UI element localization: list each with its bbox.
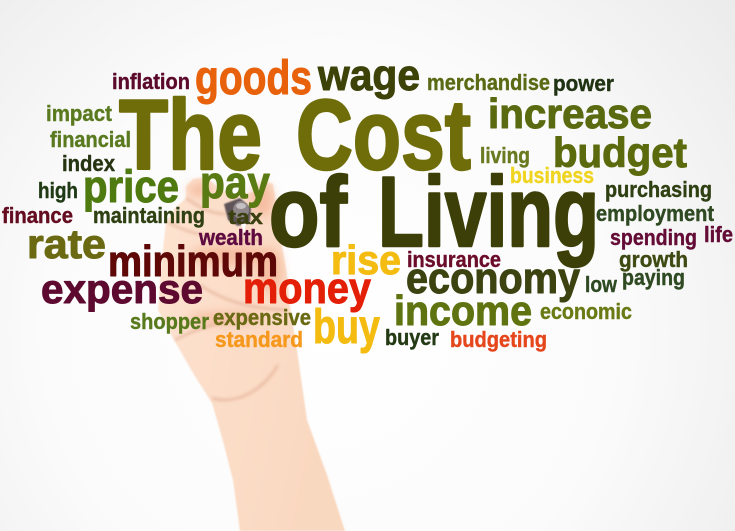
word: employment: employment: [596, 201, 715, 226]
word: financial: financial: [50, 127, 131, 152]
word: minimum: minimum: [108, 237, 278, 286]
word: wealth: wealth: [198, 225, 263, 250]
word: rate: rate: [27, 221, 106, 267]
word: business: business: [510, 163, 594, 188]
marker pen: [224, 198, 251, 234]
word: living: living: [480, 143, 530, 168]
icon: hand holding marker: [158, 177, 345, 531]
word: finance: finance: [2, 203, 73, 228]
title word: Cost: Cost: [296, 79, 471, 190]
word: high: high: [38, 178, 78, 203]
skin shading on fingers: [187, 183, 282, 324]
word: low: low: [585, 272, 618, 297]
title: The Cost of Living: [119, 79, 599, 267]
word: shopper: shopper: [130, 309, 209, 334]
word: growth: growth: [619, 247, 688, 272]
word: spending: spending: [610, 225, 697, 250]
word: tax: tax: [228, 207, 263, 229]
hand and arm: [158, 177, 345, 531]
word: expensive: expensive: [213, 305, 311, 330]
word: life: life: [704, 222, 733, 247]
word: purchasing: purchasing: [605, 177, 712, 202]
word: standard: standard: [215, 327, 303, 352]
word: inflation: inflation: [112, 69, 190, 94]
word: merchandise: merchandise: [427, 70, 550, 95]
word: power: power: [553, 71, 614, 96]
word: income: income: [394, 287, 532, 334]
word: impact: impact: [46, 101, 113, 126]
word: rise: rise: [331, 237, 401, 283]
word: budget: budget: [553, 129, 687, 176]
word: expense: expense: [41, 266, 203, 312]
title word: Living: Living: [378, 156, 599, 267]
surrounding keywords: [2, 51, 733, 354]
word: budgeting: budgeting: [450, 327, 547, 352]
word: price: price: [83, 161, 179, 212]
word: economy: economy: [406, 254, 580, 303]
word: economic: economic: [540, 299, 632, 324]
word: paying: paying: [622, 265, 685, 290]
word: pay: pay: [200, 157, 270, 208]
word: goods: goods: [195, 52, 312, 105]
word: increase: increase: [488, 90, 652, 137]
word: wage: wage: [317, 51, 420, 100]
word: index: index: [62, 151, 116, 176]
title word: The: The: [119, 79, 262, 190]
finger creases: [168, 198, 285, 400]
word: money: money: [243, 264, 371, 313]
word: maintaining: maintaining: [93, 203, 205, 228]
title word: of: of: [269, 156, 348, 267]
word: buy: buy: [313, 301, 380, 354]
word: insurance: insurance: [407, 247, 501, 272]
word: buyer: buyer: [385, 325, 439, 350]
